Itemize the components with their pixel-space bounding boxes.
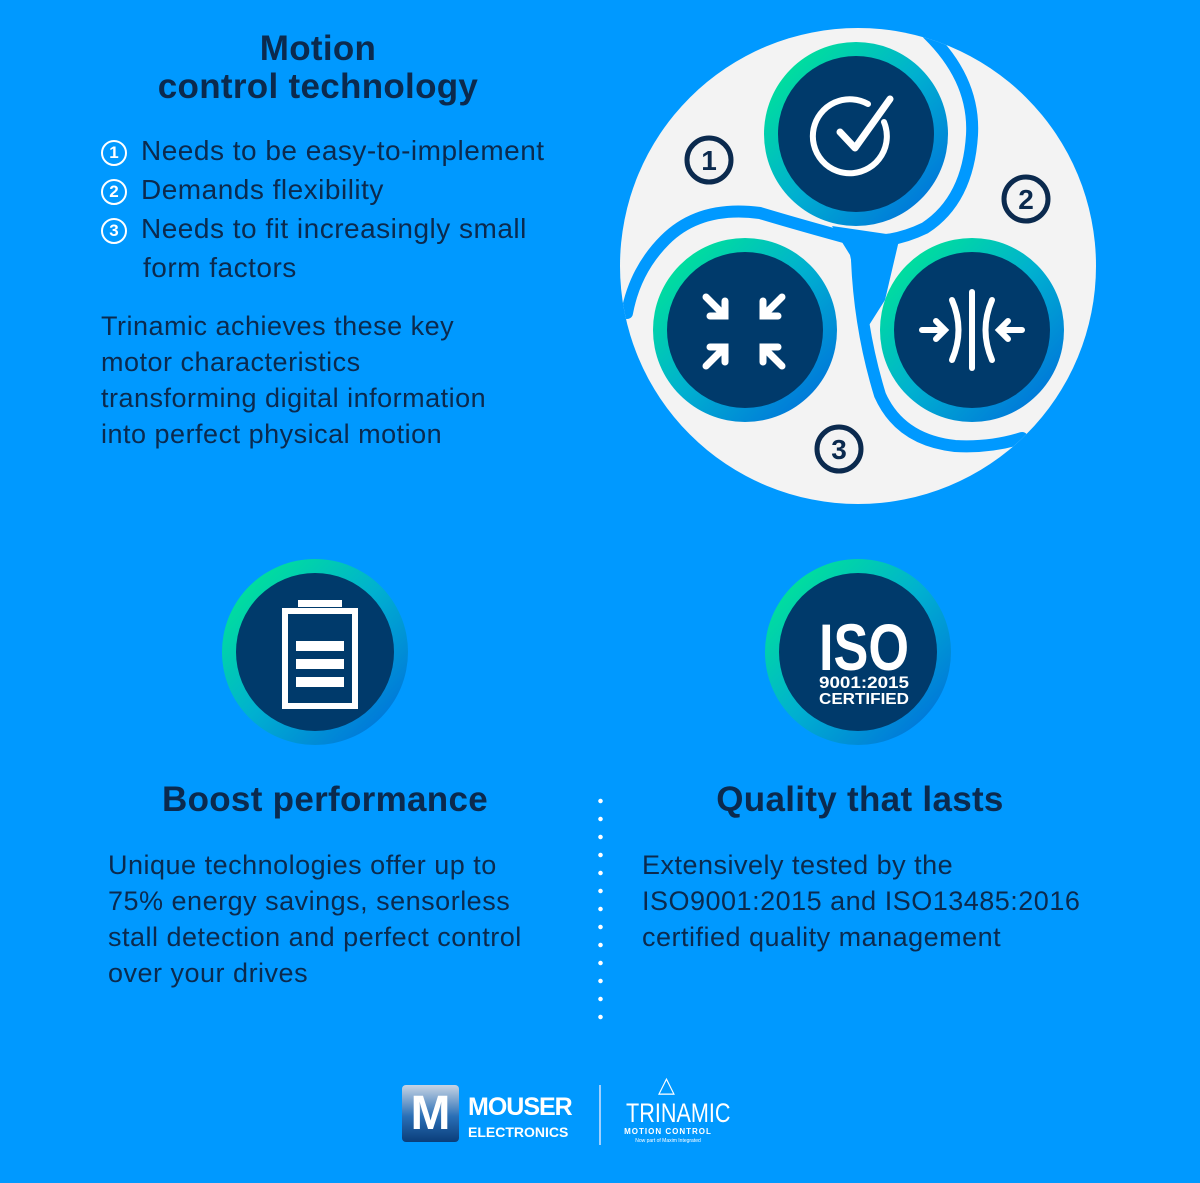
text: boost performance: 75% energy savings, sensorless <box>108 886 510 916</box>
feature 1 circle: check <box>764 42 948 226</box>
list of requirements: 2 <box>109 182 119 201</box>
text: quality: ISO9001:2015 and ISO13485:2016 <box>642 886 1080 916</box>
feature 2 circle: compress <box>880 238 1064 422</box>
logos: △ <box>658 1072 675 1097</box>
intro text: transforming digital information <box>101 383 486 413</box>
text: quality <box>642 850 1080 952</box>
intro text: into perfect physical motion <box>101 419 442 449</box>
logo: trinamic: MOTION CONTROL <box>624 1127 712 1136</box>
logos: ELECTRONICS <box>468 1124 568 1140</box>
list of requirements: 1 <box>109 143 119 162</box>
intro text: motor characteristics <box>101 347 361 377</box>
list of requirements: Needs to fit increasingly small <box>141 213 527 244</box>
list of requirements: form factors <box>143 252 297 283</box>
text: quality: certified quality management <box>642 922 1001 952</box>
heading: boost performance: Boost performance <box>162 780 488 819</box>
icon: battery <box>222 559 408 745</box>
text: boost performance: over your drives <box>108 958 308 988</box>
logos <box>402 1072 730 1145</box>
center blue gap <box>832 226 900 330</box>
feature 3 circle: shrink arrows <box>653 238 837 422</box>
logo: trinamic <box>624 1098 730 1144</box>
icon: ISO certified: CERTIFIED <box>819 691 909 708</box>
heading: quality: Quality that lasts <box>716 780 1004 819</box>
diagram: three features: 2 <box>1018 184 1034 215</box>
icon: ISO certified <box>765 559 951 745</box>
diagram: three features: 1 <box>701 145 717 176</box>
logo: trinamic: TRINAMIC <box>626 1098 730 1128</box>
list of requirements: 3 <box>109 221 119 240</box>
logo: mouser <box>402 1085 459 1142</box>
text: quality: Extensively tested by the <box>642 850 953 880</box>
number labels <box>687 138 1048 471</box>
intro text <box>101 311 486 449</box>
list of requirements <box>101 135 545 283</box>
list of requirements: Demands flexibility <box>141 174 384 205</box>
logo: trinamic: Now part of Maxim Integrated <box>635 1138 701 1144</box>
intro text: Trinamic achieves these key <box>101 311 454 341</box>
diagram: three features: 3 <box>831 434 847 465</box>
icon: ISO certified: ISO <box>819 610 909 684</box>
text: boost performance: stall detection and perfect control <box>108 922 522 952</box>
title: control technology <box>158 67 478 106</box>
title: Motion <box>260 29 376 68</box>
text: boost performance: Unique technologies offer up to <box>108 850 497 880</box>
title <box>158 29 478 106</box>
icon: ISO certified: 9001:2015 <box>819 673 909 692</box>
text: boost performance <box>108 850 522 988</box>
list of requirements: Needs to be easy-to-implement <box>141 135 545 166</box>
logos: MOUSER <box>468 1093 572 1121</box>
diagram: three features <box>620 28 1096 504</box>
logo: mouser: M <box>410 1087 450 1140</box>
